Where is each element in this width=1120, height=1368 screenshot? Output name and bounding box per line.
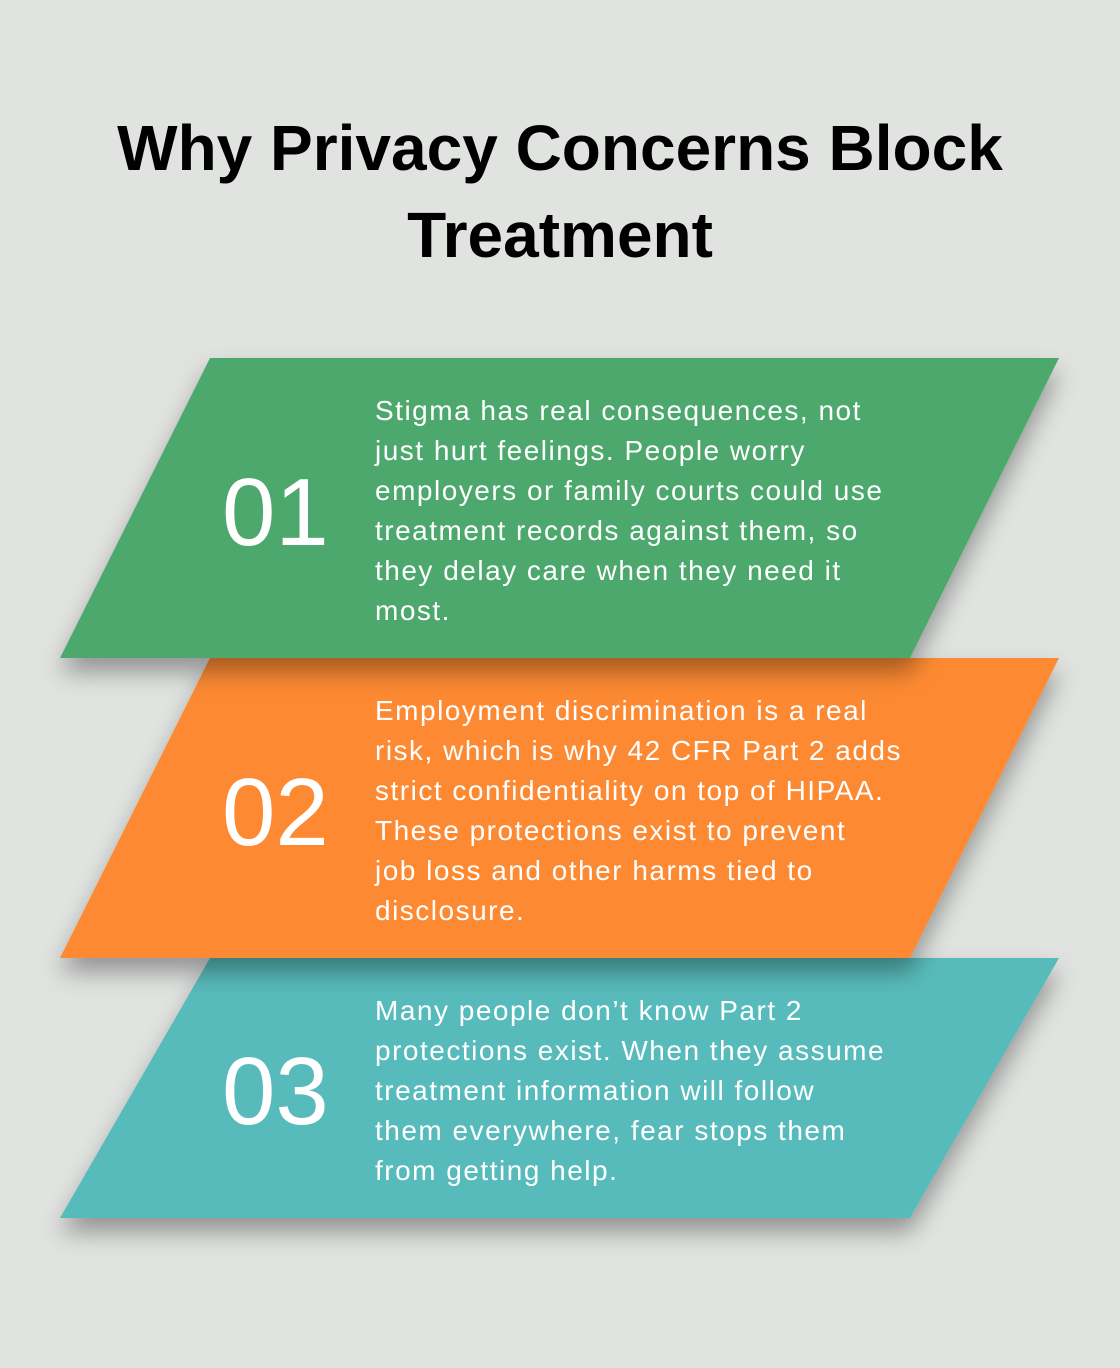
text 01: treatment records against them, so xyxy=(375,515,859,546)
text 02: disclosure. xyxy=(375,895,525,926)
panel 03 xyxy=(60,958,1059,1218)
text 02: risk, which is why 42 CFR Part 2 adds xyxy=(375,735,902,766)
text 01: just hurt feelings. People worry xyxy=(374,435,806,466)
number 03: 03 xyxy=(222,1038,329,1145)
number 01: 01 xyxy=(222,459,329,566)
number 02: 02 xyxy=(222,759,329,866)
text 03 xyxy=(375,995,885,1186)
text 02 xyxy=(374,695,902,926)
text 01: most. xyxy=(375,595,451,626)
text 02: These protections exist to prevent xyxy=(375,815,846,846)
text 02: Employment discrimination is a real xyxy=(375,695,868,726)
title: Treatment xyxy=(407,199,713,271)
text 02: strict confidentiality on top of HIPAA. xyxy=(375,775,884,806)
text 01 xyxy=(374,395,883,626)
text 01: they delay care when they need it xyxy=(375,555,842,586)
panel 01 xyxy=(60,358,1059,658)
title: Why Privacy Concerns Block xyxy=(117,112,1003,184)
text 02: job loss and other harms tied to xyxy=(374,855,814,886)
panel 02 xyxy=(60,658,1059,958)
text 03: Many people don’t know Part 2 xyxy=(375,995,803,1026)
text 01: Stigma has real consequences, not xyxy=(375,395,862,426)
text 01: employers or family courts could use xyxy=(375,475,883,506)
title xyxy=(117,112,1003,271)
text 03: from getting help. xyxy=(375,1155,618,1186)
text 03: protections exist. When they assume xyxy=(375,1035,885,1066)
text 03: treatment information will follow xyxy=(375,1075,815,1106)
text 03: them everywhere, fear stops them xyxy=(375,1115,846,1146)
